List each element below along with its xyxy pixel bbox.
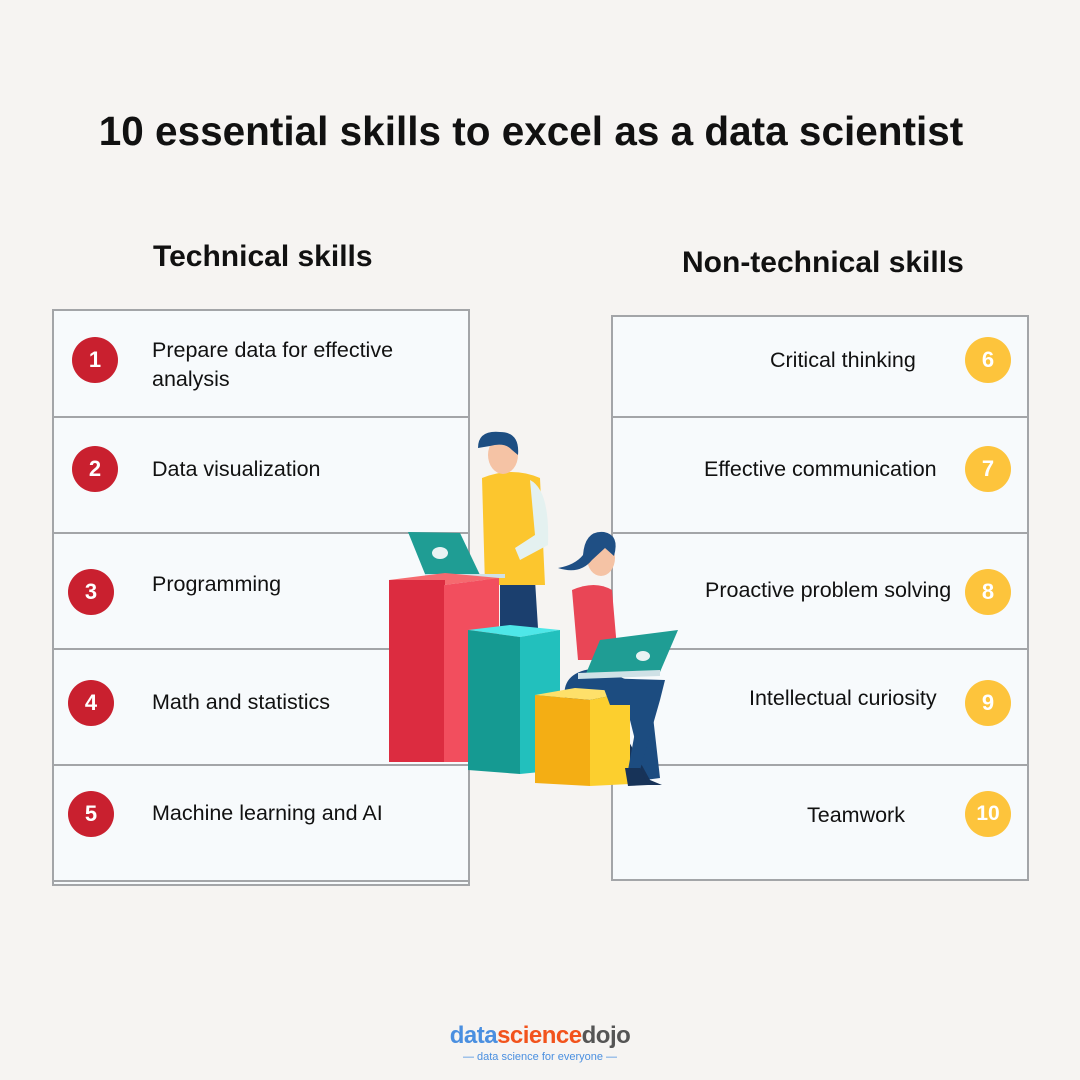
text 3: Programming (152, 572, 281, 596)
badge 2: 2 (89, 456, 101, 481)
badge 8 (965, 569, 1011, 615)
text 1 (152, 338, 393, 391)
badge 1 (72, 337, 118, 383)
badge 4: 4 (85, 690, 97, 715)
badge 4 (68, 680, 114, 726)
man (500, 580, 538, 628)
text 1: analysis (152, 367, 230, 391)
text 6: Critical thinking (770, 348, 916, 372)
text 7: Effective communication (704, 457, 937, 481)
badge 3: 3 (85, 579, 97, 604)
logo: datasciencedojo (450, 1022, 630, 1049)
badge 1: 1 (89, 347, 101, 372)
badge 10 (965, 791, 1011, 837)
badge 9 (965, 680, 1011, 726)
badge 3 (68, 569, 114, 615)
badge 6 (965, 337, 1011, 383)
badge 7: 7 (982, 456, 994, 481)
text 9: Intellectual curiosity (749, 686, 937, 710)
yellow block (535, 688, 630, 700)
text 4: Math and statistics (152, 690, 330, 714)
badge 5 (68, 791, 114, 837)
red block (389, 573, 499, 585)
heading: non-technical skills: Non-technical skills (682, 246, 964, 279)
badge 7 (965, 446, 1011, 492)
badge 10: 10 (976, 802, 1000, 825)
text 2: Data visualization (152, 457, 321, 481)
text 8: Proactive problem solving (705, 578, 951, 602)
teal block (468, 625, 560, 637)
heading: technical skills: Technical skills (153, 240, 373, 273)
text 10: Teamwork (807, 803, 905, 827)
logo (450, 1022, 630, 1063)
badge 5: 5 (85, 801, 97, 826)
badge 6: 6 (982, 347, 994, 372)
text 1: Prepare data for effective (152, 338, 393, 362)
panel: technical skills (52, 309, 470, 886)
badge 8: 8 (982, 579, 994, 604)
woman (564, 668, 660, 780)
panel: non-technical skills (611, 315, 1029, 881)
text 5: Machine learning and AI (152, 801, 383, 825)
title: 10 essential skills to excel as a data scientist (99, 108, 963, 154)
badge 2 (72, 446, 118, 492)
logo: — data science for everyone — (463, 1051, 617, 1063)
badge 9: 9 (982, 690, 994, 715)
